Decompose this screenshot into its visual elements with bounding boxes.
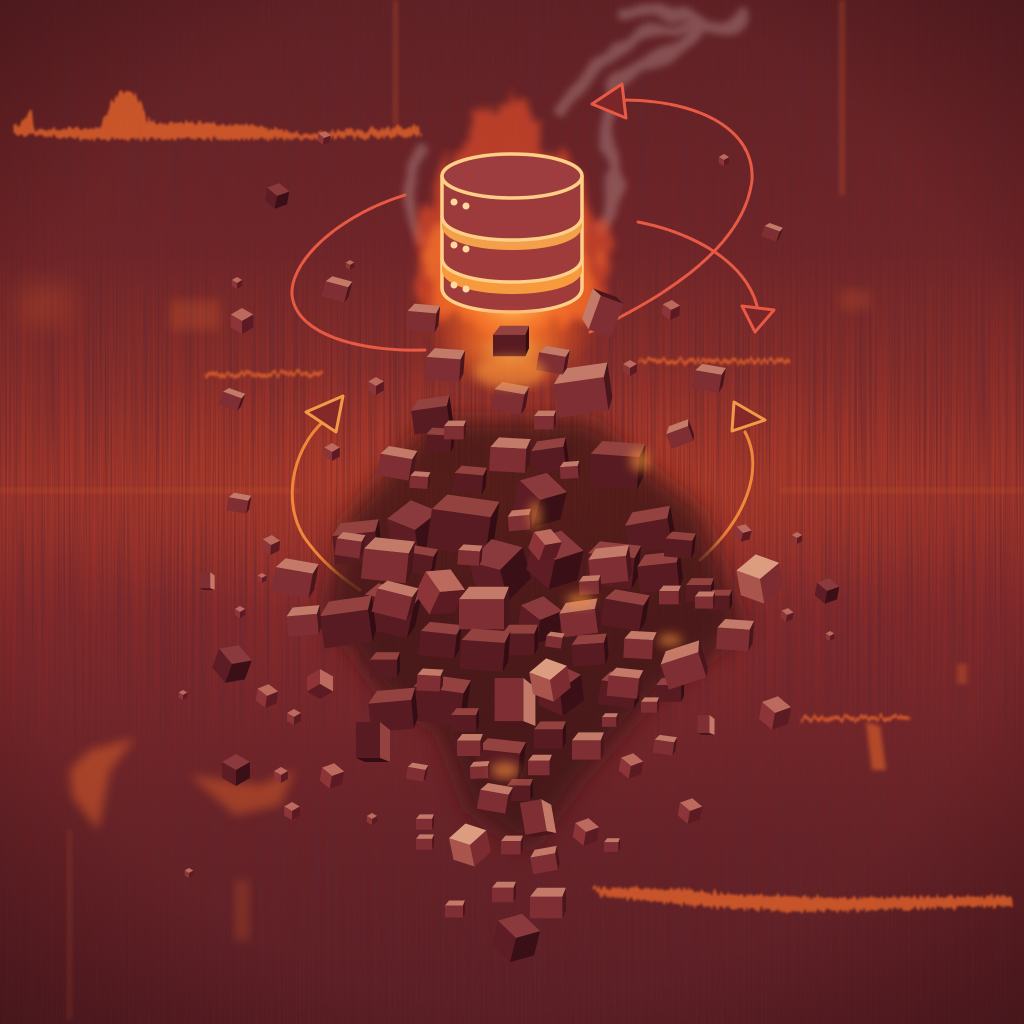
arrow: lower right orbit	[700, 432, 753, 560]
arrow: upper left orbit	[292, 195, 425, 350]
arrow: lower left orbit	[292, 420, 360, 590]
database bottom tier	[442, 258, 582, 312]
flames behind database	[414, 80, 610, 372]
database indicator lights	[450, 198, 470, 292]
database lid	[442, 154, 582, 198]
database top tier	[442, 176, 582, 240]
arrowhead: lower right	[732, 402, 765, 431]
arrowhead: top	[592, 84, 626, 118]
arrows: circular orbit	[292, 84, 774, 590]
icon: database	[442, 154, 582, 312]
database orange band upper	[442, 212, 582, 250]
database middle tier	[442, 216, 582, 282]
orange hot spots in the rubble	[474, 356, 682, 778]
arrowhead: right	[742, 306, 774, 332]
arrowhead: lower left up	[306, 396, 343, 432]
arrow: upper right orbit	[590, 100, 752, 332]
cubes: scattered fragments	[179, 130, 840, 968]
smoke	[407, 11, 740, 240]
arrow: right inner orbit	[638, 222, 757, 306]
rubble pile base	[325, 305, 745, 850]
cubes: central pile	[271, 348, 754, 874]
database orange band lower	[442, 254, 582, 294]
